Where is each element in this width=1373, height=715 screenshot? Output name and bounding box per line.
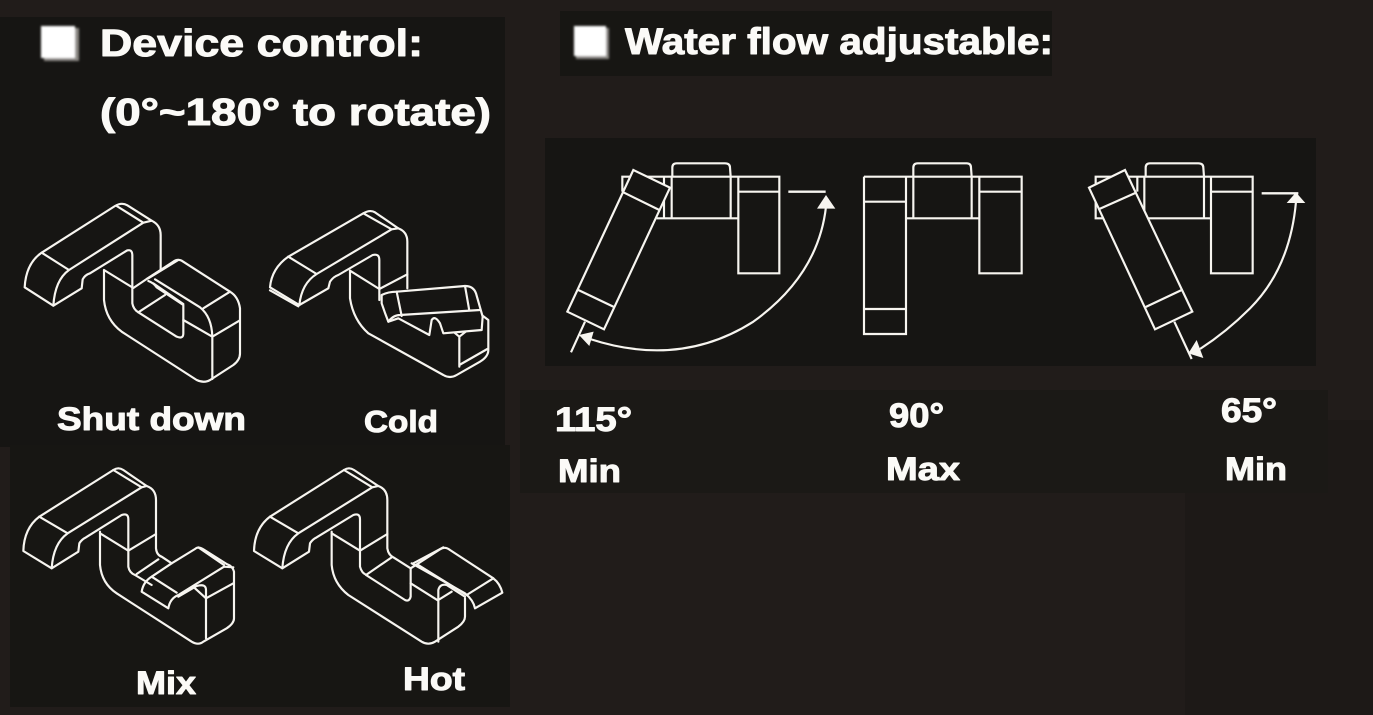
diagram: 90 degree position [864,163,1022,334]
diagram: hot handle position [254,468,502,644]
label: 115 degrees: 115° [555,401,632,439]
diagram: 65 degree position [1089,163,1305,359]
diagram: shut down handle position [25,204,240,382]
label: hot: Hot [403,661,465,697]
label: min right: Min [1225,451,1287,487]
label: cold: Cold [364,404,438,439]
diagram: mix handle position [23,468,234,644]
label: mix: Mix [136,665,196,701]
heading: rotation range: (0°~180° to rotate) [100,92,491,134]
panel: flow diagrams [545,138,1316,366]
panel: flow labels [520,390,1328,493]
label: min left: Min [558,453,621,489]
diagram: cold handle position [270,211,488,377]
heading: device control: Device control: [100,23,423,65]
label: max: Max [886,451,960,487]
diagram: 115 degree position [567,163,835,352]
arrow: 115 degree sweep [579,195,835,350]
icon: device control bullet [41,26,79,61]
icon: water flow bullet [574,26,609,59]
background tone panel lower right [1185,420,1373,715]
panel: water flow heading [560,11,1064,76]
label: 65 degrees: 65° [1221,392,1277,430]
arrow: 65 degree sweep [1188,192,1305,358]
panel: device control [0,17,510,707]
label: shut down: Shut down [57,401,246,437]
heading: water flow adjustable: Water flow adjustable: [625,21,1053,62]
label: 90 degrees: 90° [889,397,944,435]
